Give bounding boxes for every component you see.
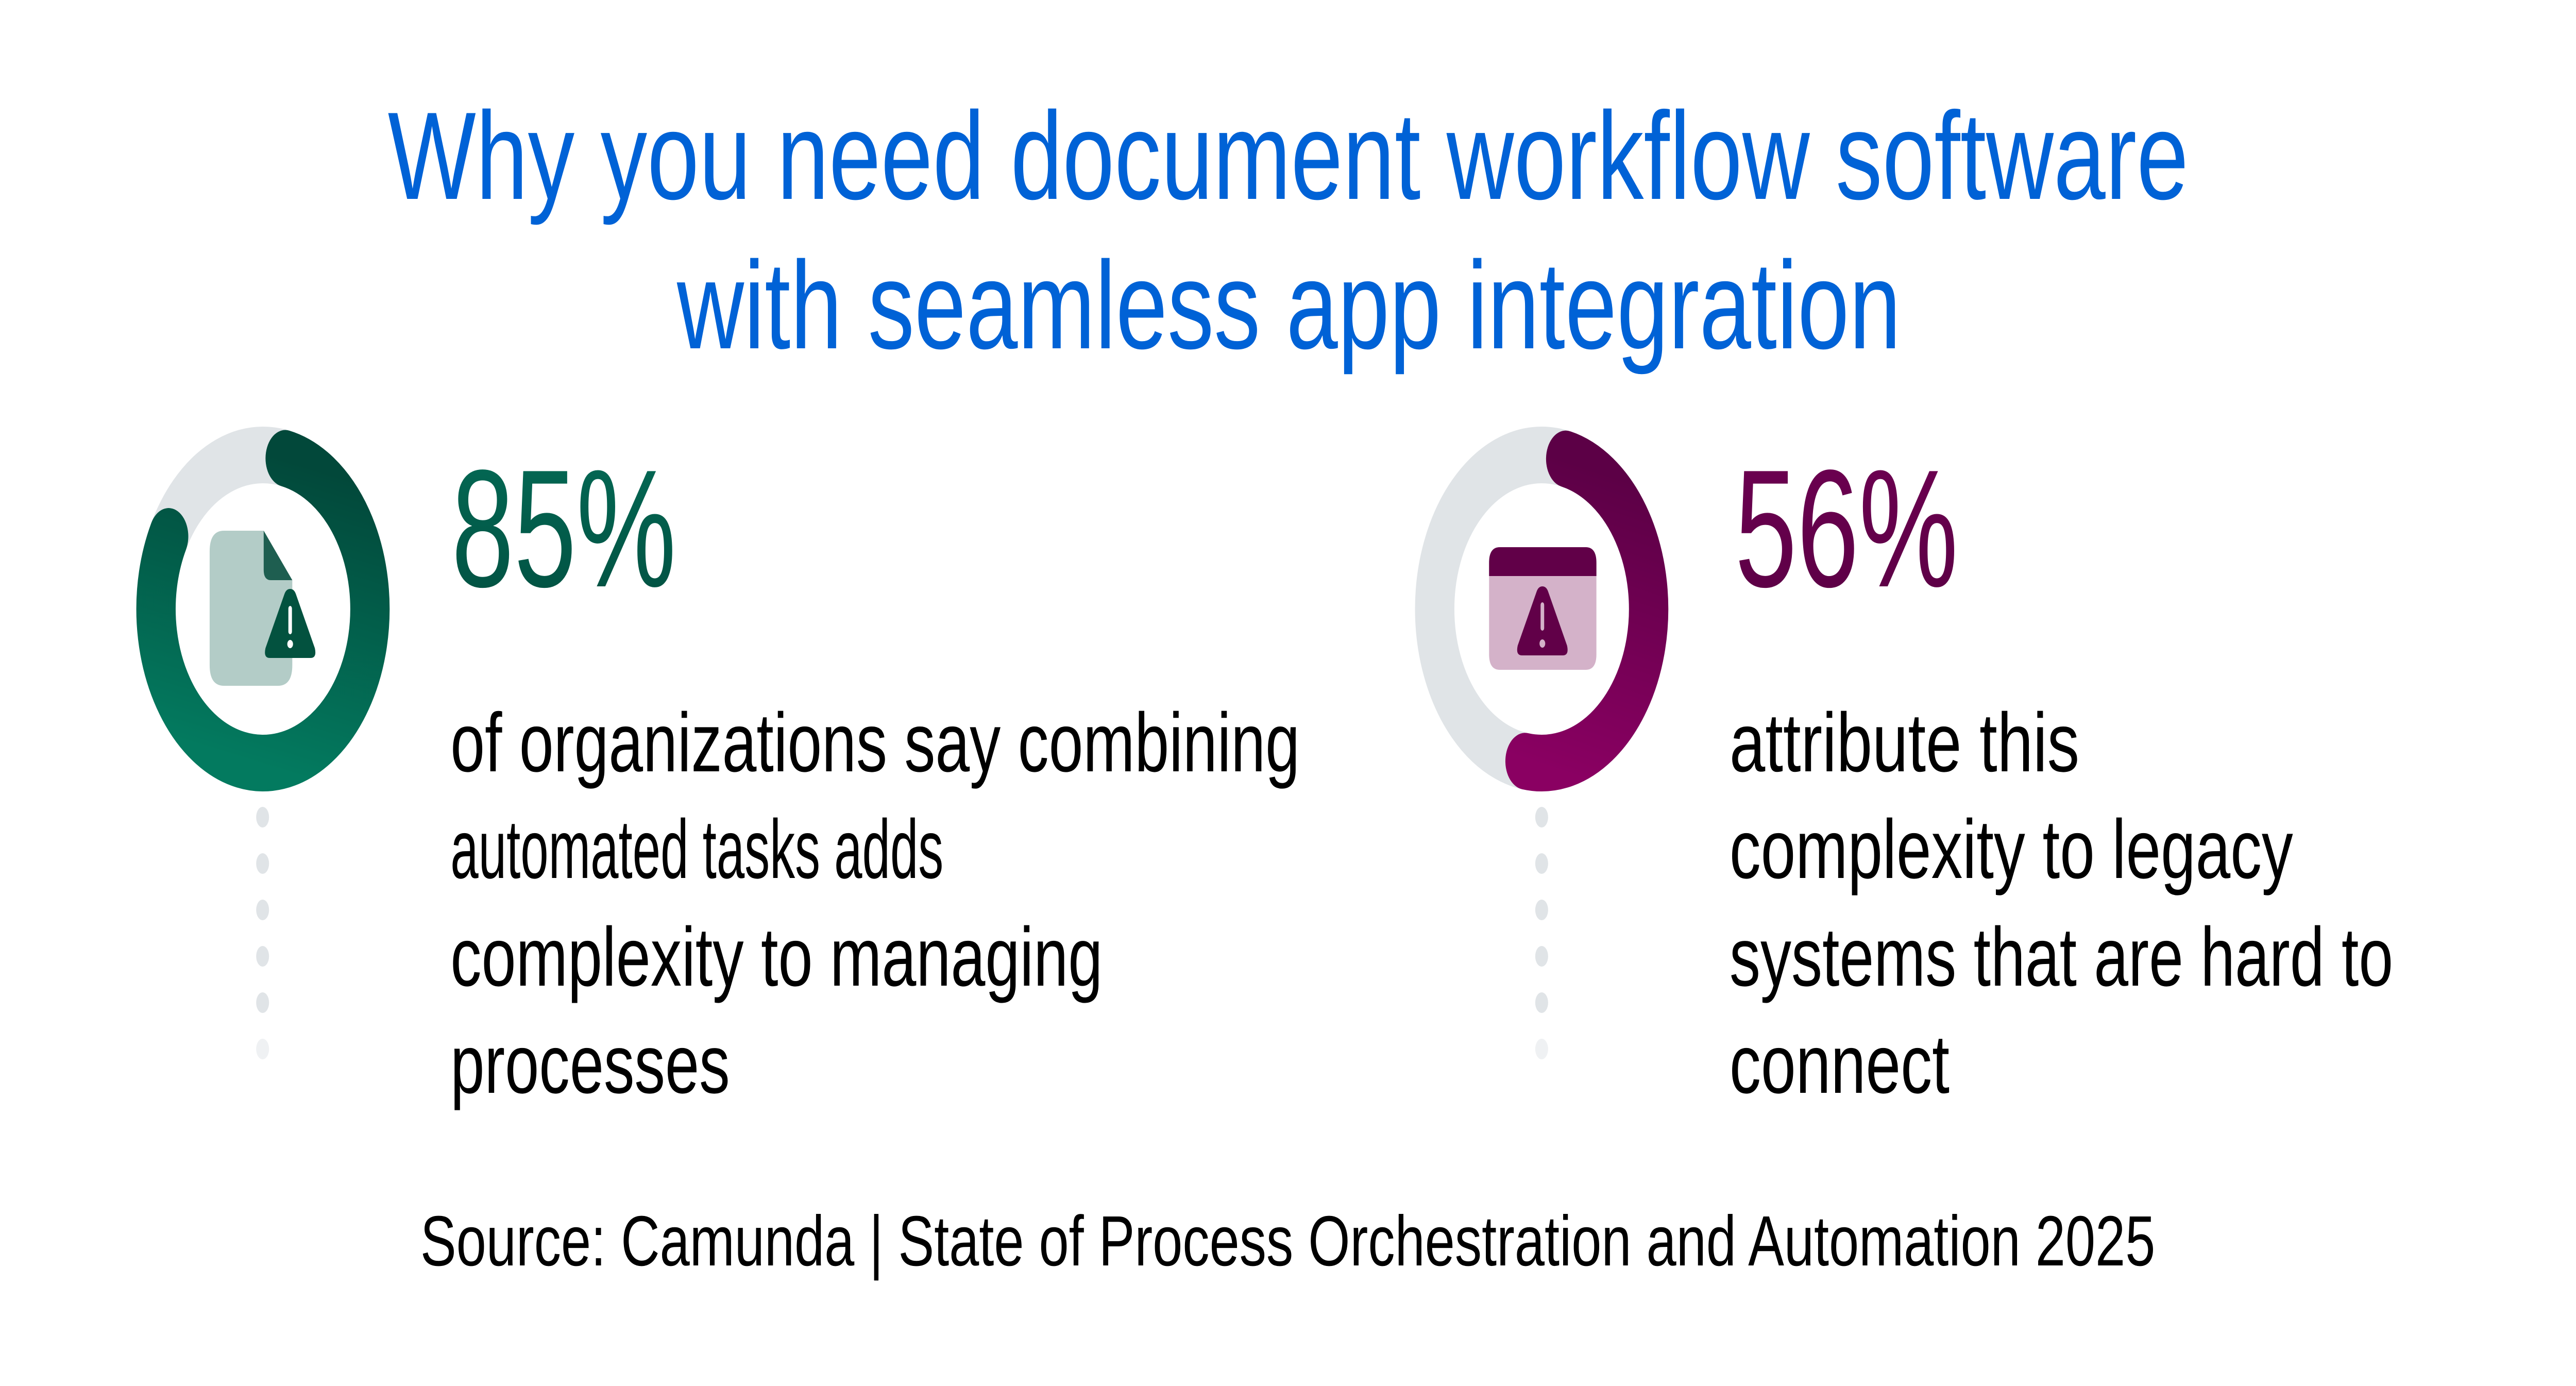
ring chart: 85% bbox=[136, 426, 390, 792]
stat number: 85%: 85% bbox=[451, 435, 676, 622]
panel: 85% stat bbox=[136, 426, 1300, 1111]
text block: 56% description bbox=[1730, 696, 2393, 1111]
text block: 85% description: of organizations say combining bbox=[450, 696, 1300, 789]
text block: 56% description: systems that are hard to bbox=[1730, 910, 2393, 1004]
panel: 56% stat bbox=[1413, 424, 2393, 1111]
stat number: 56%: 56% bbox=[1735, 435, 1958, 622]
title: with seamless app integration bbox=[676, 236, 1901, 375]
ring chart: 56% bbox=[1413, 424, 1670, 794]
dotted connector bbox=[1535, 807, 1548, 1059]
text block: 85% description: automated tasks adds bbox=[450, 803, 943, 896]
text block: 56% description: connect bbox=[1730, 1018, 1950, 1111]
source footer: Source: Camunda | State of Process Orchestration and Automation 2025 bbox=[420, 1202, 2155, 1281]
text block: 85% description bbox=[450, 696, 1300, 1111]
icon: window with warning bbox=[1489, 547, 1597, 670]
text block: 85% description: processes bbox=[450, 1018, 730, 1111]
text block: 56% description: complexity to legacy bbox=[1730, 803, 2293, 896]
title bbox=[388, 87, 2189, 375]
text block: 85% description: complexity to managing bbox=[450, 910, 1103, 1004]
dotted connector bbox=[256, 807, 269, 1059]
icon: document with warning bbox=[210, 531, 315, 686]
title: Why you need document workflow software bbox=[388, 87, 2189, 226]
text block: 56% description: attribute this bbox=[1730, 696, 2079, 789]
